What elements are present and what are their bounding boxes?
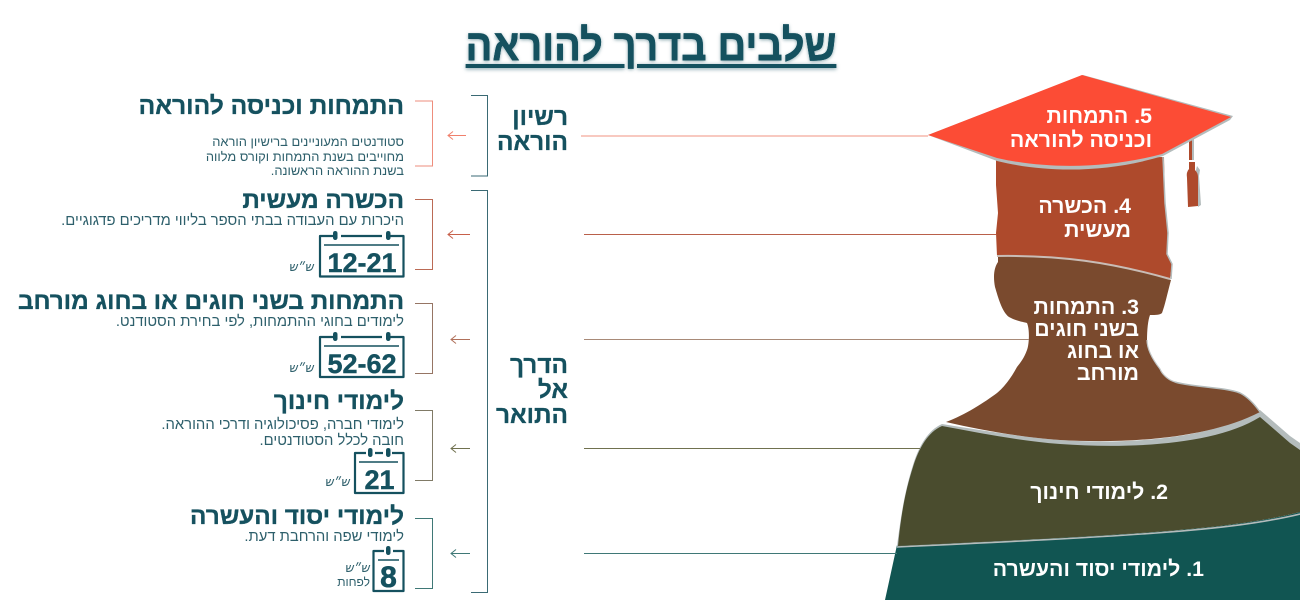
unit: 12-21: ש״ש (289, 260, 314, 274)
arrow 4 (448, 230, 470, 238)
figure label 3: או בחוג (1067, 339, 1139, 363)
arrow 2 (451, 444, 470, 452)
calendar icon: 21: 21 (364, 465, 395, 495)
text: induction: מחוייבים בשנת התמחות וקורס מלווה (206, 148, 404, 164)
unit: 21: ש״ש (325, 475, 350, 489)
figure label 3: בשני חוגים (1034, 317, 1139, 341)
figure label 3: מורחב (1077, 361, 1139, 385)
connector line to band 1 (584, 552, 897, 554)
calendar icon: 8: 8 (380, 561, 397, 594)
figure label 2: 2. לימודי חינוך (1030, 480, 1168, 504)
unit: 8: ש״ש (345, 561, 370, 575)
small bracket 3 (415, 304, 432, 374)
calendar icon: 21 (355, 448, 404, 495)
connector line to band 3 (584, 338, 1029, 340)
band 3: specialization (946, 240, 1260, 441)
calendar icon: 12-21 (320, 231, 404, 278)
unit: 8: לפחות (337, 575, 370, 589)
heading: foundation studies: לימודי יסוד והעשרה (190, 503, 404, 530)
text: foundation studies: לימודי שפה והרחבת דעת. (244, 529, 404, 545)
band 2: education studies (897, 410, 1300, 546)
label: path to degree: אל (538, 377, 568, 404)
figure label 1: 1. לימודי יסוד והעשרה (993, 557, 1204, 581)
text: induction: סטודנטים המעוניינים ברישיון הוראה (212, 134, 404, 149)
small bracket 4 (415, 200, 432, 270)
figure label 5 (1010, 104, 1152, 152)
text: education studies: לימודי חברה, פסיכולוגיה ודרכי ההוראה. (161, 417, 404, 433)
text: education studies (161, 416, 404, 449)
figure label 5: 5. התמחות (1047, 104, 1152, 128)
text: specialization: לימודים בחוגי ההתמחות, לפי בחירת הסטודנט. (116, 314, 404, 330)
small bracket 5 (415, 101, 432, 166)
heading: induction: התמחות וכניסה להוראה (139, 93, 404, 120)
calendar icon: 52-62 (320, 332, 404, 379)
label: teaching licence: רשיון (512, 104, 568, 131)
calendar icon: 8 (374, 546, 404, 594)
calendar icon: 52-62: 52-62 (327, 349, 397, 379)
figure label 5: וכניסה להוראה (1010, 128, 1152, 152)
label: path to degree: התואר (496, 402, 568, 429)
small bracket 1 (415, 518, 432, 588)
calendar icon: 12-21: 12-21 (327, 248, 397, 278)
text: induction (206, 134, 404, 178)
title: שלבים בדרך להוראה (466, 21, 836, 70)
unit: 8 (337, 561, 370, 589)
band 1: foundation studies (885, 512, 1300, 600)
label: teaching licence: הוראה (497, 129, 568, 156)
text: practical training: היכרות עם העבודה בבתי הספר בליווי מדריכים פדגוגיים. (61, 213, 404, 229)
figure label 4: מעשית (1064, 218, 1131, 242)
text: education studies: חובה לכלל הסטודנטים. (260, 433, 404, 449)
heading: specialization: התמחות בשני חוגים או בחוג מורחב (18, 288, 404, 315)
graduation cap: induction (928, 75, 1233, 170)
arrow 5 (448, 132, 466, 140)
graduation cap tassel (1187, 137, 1201, 207)
label: path to degree: הדרך (510, 352, 568, 379)
heading: education studies: לימודי חינוך (274, 388, 404, 415)
connector line to band 2 (584, 448, 920, 450)
band 4: practical training (996, 157, 1172, 279)
arrow 3 (451, 336, 470, 344)
figure label 3: 3. התמחות (1034, 295, 1139, 319)
figure label 3 (1034, 295, 1139, 385)
text: induction: בשנת ההוראה הראשונה. (271, 163, 404, 178)
label: path to degree (496, 352, 568, 429)
heading: practical training: הכשרה מעשית (242, 187, 404, 214)
connector line to cap (581, 135, 928, 137)
unit: 52-62: ש״ש (289, 361, 314, 375)
arrow 1 (451, 550, 470, 558)
figure label 4: 4. הכשרה (1038, 194, 1131, 218)
label: teaching licence (497, 104, 568, 156)
connector line to band 4 (584, 234, 996, 236)
figure label 4 (1038, 194, 1131, 242)
large bracket: teaching licence (471, 96, 488, 176)
small bracket 2 (415, 410, 432, 480)
large bracket: path to degree (471, 190, 488, 592)
